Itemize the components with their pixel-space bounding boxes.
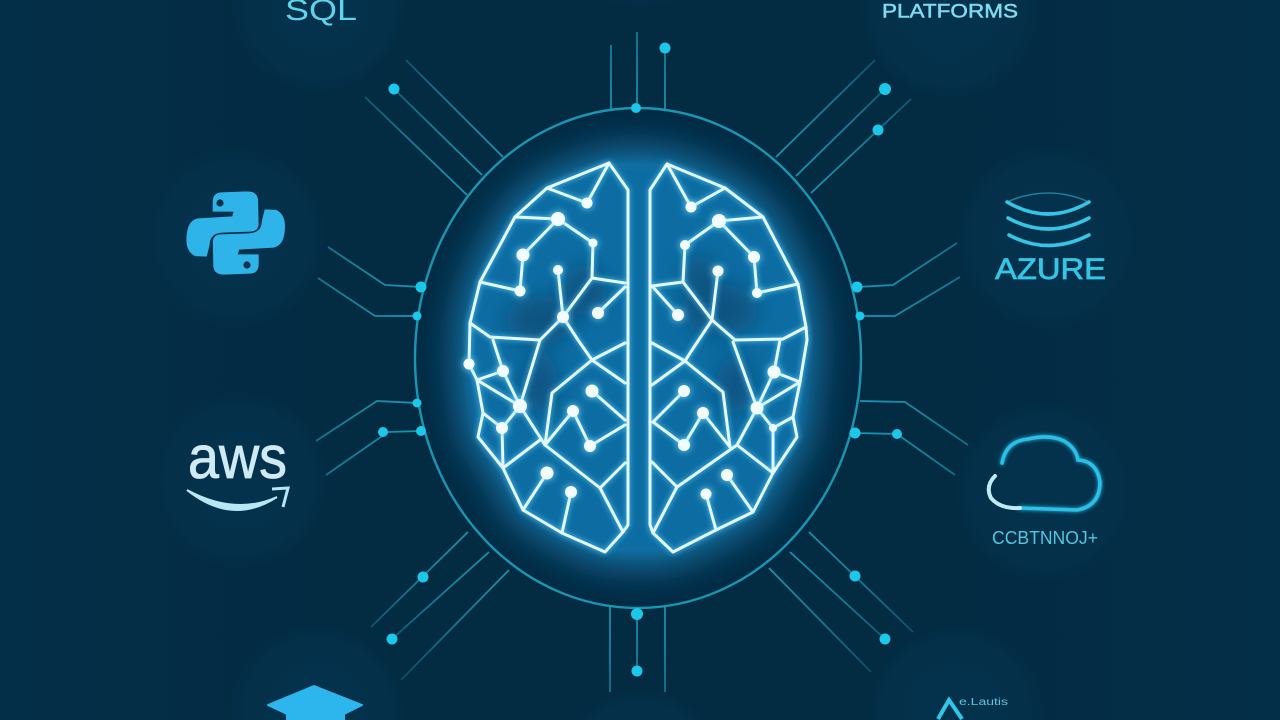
connectors: middle left xyxy=(316,247,421,475)
left hemisphere xyxy=(469,163,628,552)
connector lines xyxy=(316,32,968,692)
icon backdrop discs xyxy=(144,0,1142,720)
brain dark patches xyxy=(505,255,758,415)
brain halo xyxy=(469,163,807,552)
icon: platforms label: PLATFORMS xyxy=(882,0,1018,22)
connectors: lower right xyxy=(769,532,913,672)
icon: bottom right triangle logo: e.Lautis xyxy=(959,697,1008,708)
connectors: upper right xyxy=(776,60,911,193)
connectors: bottom xyxy=(610,607,665,692)
icon: azure logo xyxy=(995,193,1106,286)
connector dots xyxy=(378,42,902,676)
brain network xyxy=(469,163,807,552)
brain fill xyxy=(469,163,807,552)
connectors: middle right xyxy=(855,243,968,475)
icon: azure logo: AZURE xyxy=(995,253,1106,286)
brain nodes xyxy=(464,198,780,500)
icon: aws logo: aws xyxy=(188,424,287,491)
connectors: top xyxy=(611,32,665,110)
connectors: upper left xyxy=(365,60,503,195)
icon: python logo xyxy=(186,191,285,275)
icon: graduation cap xyxy=(268,686,362,720)
right hemisphere xyxy=(650,164,807,552)
icon: cloud xyxy=(989,437,1100,548)
ring around brain xyxy=(415,108,861,608)
icon: cloud: CCBTNNOJ+ xyxy=(992,528,1098,548)
icon: bottom right triangle logo xyxy=(938,697,1008,719)
connectors: lower left xyxy=(371,532,509,680)
